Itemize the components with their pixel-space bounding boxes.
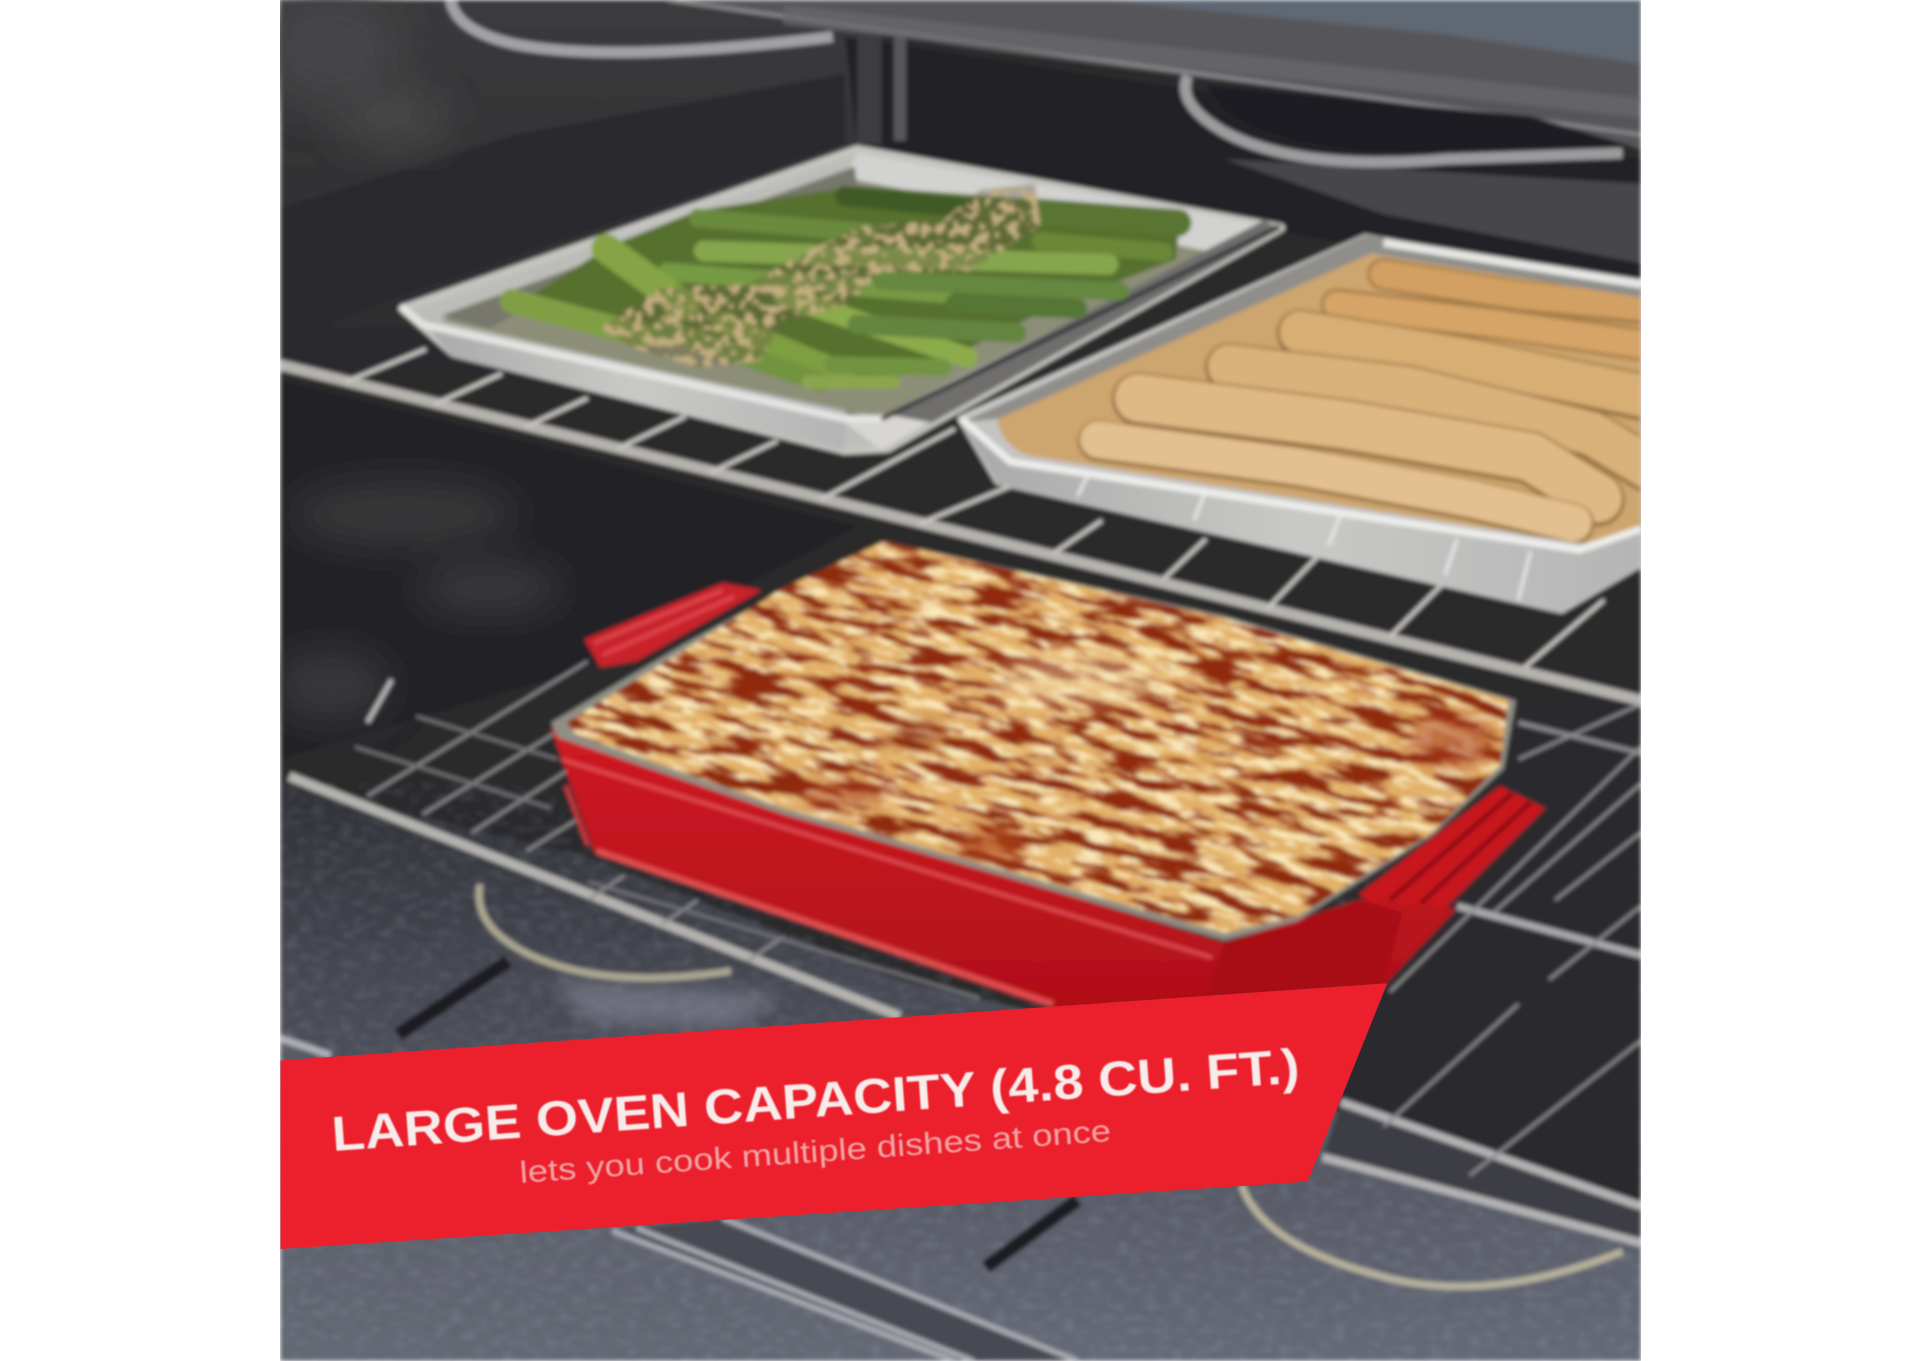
top heating element and upper rack (451, 0, 1641, 162)
banner headline: LARGE OVEN CAPACITY (4.8 CU. FT.) (330, 1040, 1301, 1162)
banner subheading: lets you cook multiple dishes at once (519, 1114, 1112, 1190)
banner text (330, 1040, 1301, 1190)
asparagus spears (512, 186, 1182, 389)
tray: asparagus (400, 149, 1281, 451)
oven photo (257, 0, 1694, 1361)
right dark wall reflection below rack (1350, 783, 1641, 1198)
floor slots (398, 961, 1078, 1267)
oven back wall (280, 0, 1641, 1038)
oven floor (280, 784, 1641, 1361)
lower oven rack (289, 661, 1641, 1243)
breadsticks (1098, 274, 1647, 524)
floor rails (612, 1218, 1078, 1361)
oven floor heating loop, right (1242, 1185, 1622, 1286)
dish body (551, 729, 1457, 1009)
dish rim (551, 541, 1516, 940)
upper oven rack (280, 349, 1641, 700)
red baking dish with lasagna (548, 538, 1548, 1008)
lasagna (566, 538, 1512, 936)
red banner (280, 983, 1387, 1249)
crumb topping (600, 184, 1041, 367)
dish left handle (584, 583, 762, 667)
banner shape (280, 983, 1387, 1249)
oven floor heating loop, left (479, 884, 731, 978)
tray: breadsticks (961, 235, 1647, 612)
product photo infographic: oven interior with dishes and red banner (280, 0, 1641, 1361)
dish right handle (1359, 786, 1545, 918)
